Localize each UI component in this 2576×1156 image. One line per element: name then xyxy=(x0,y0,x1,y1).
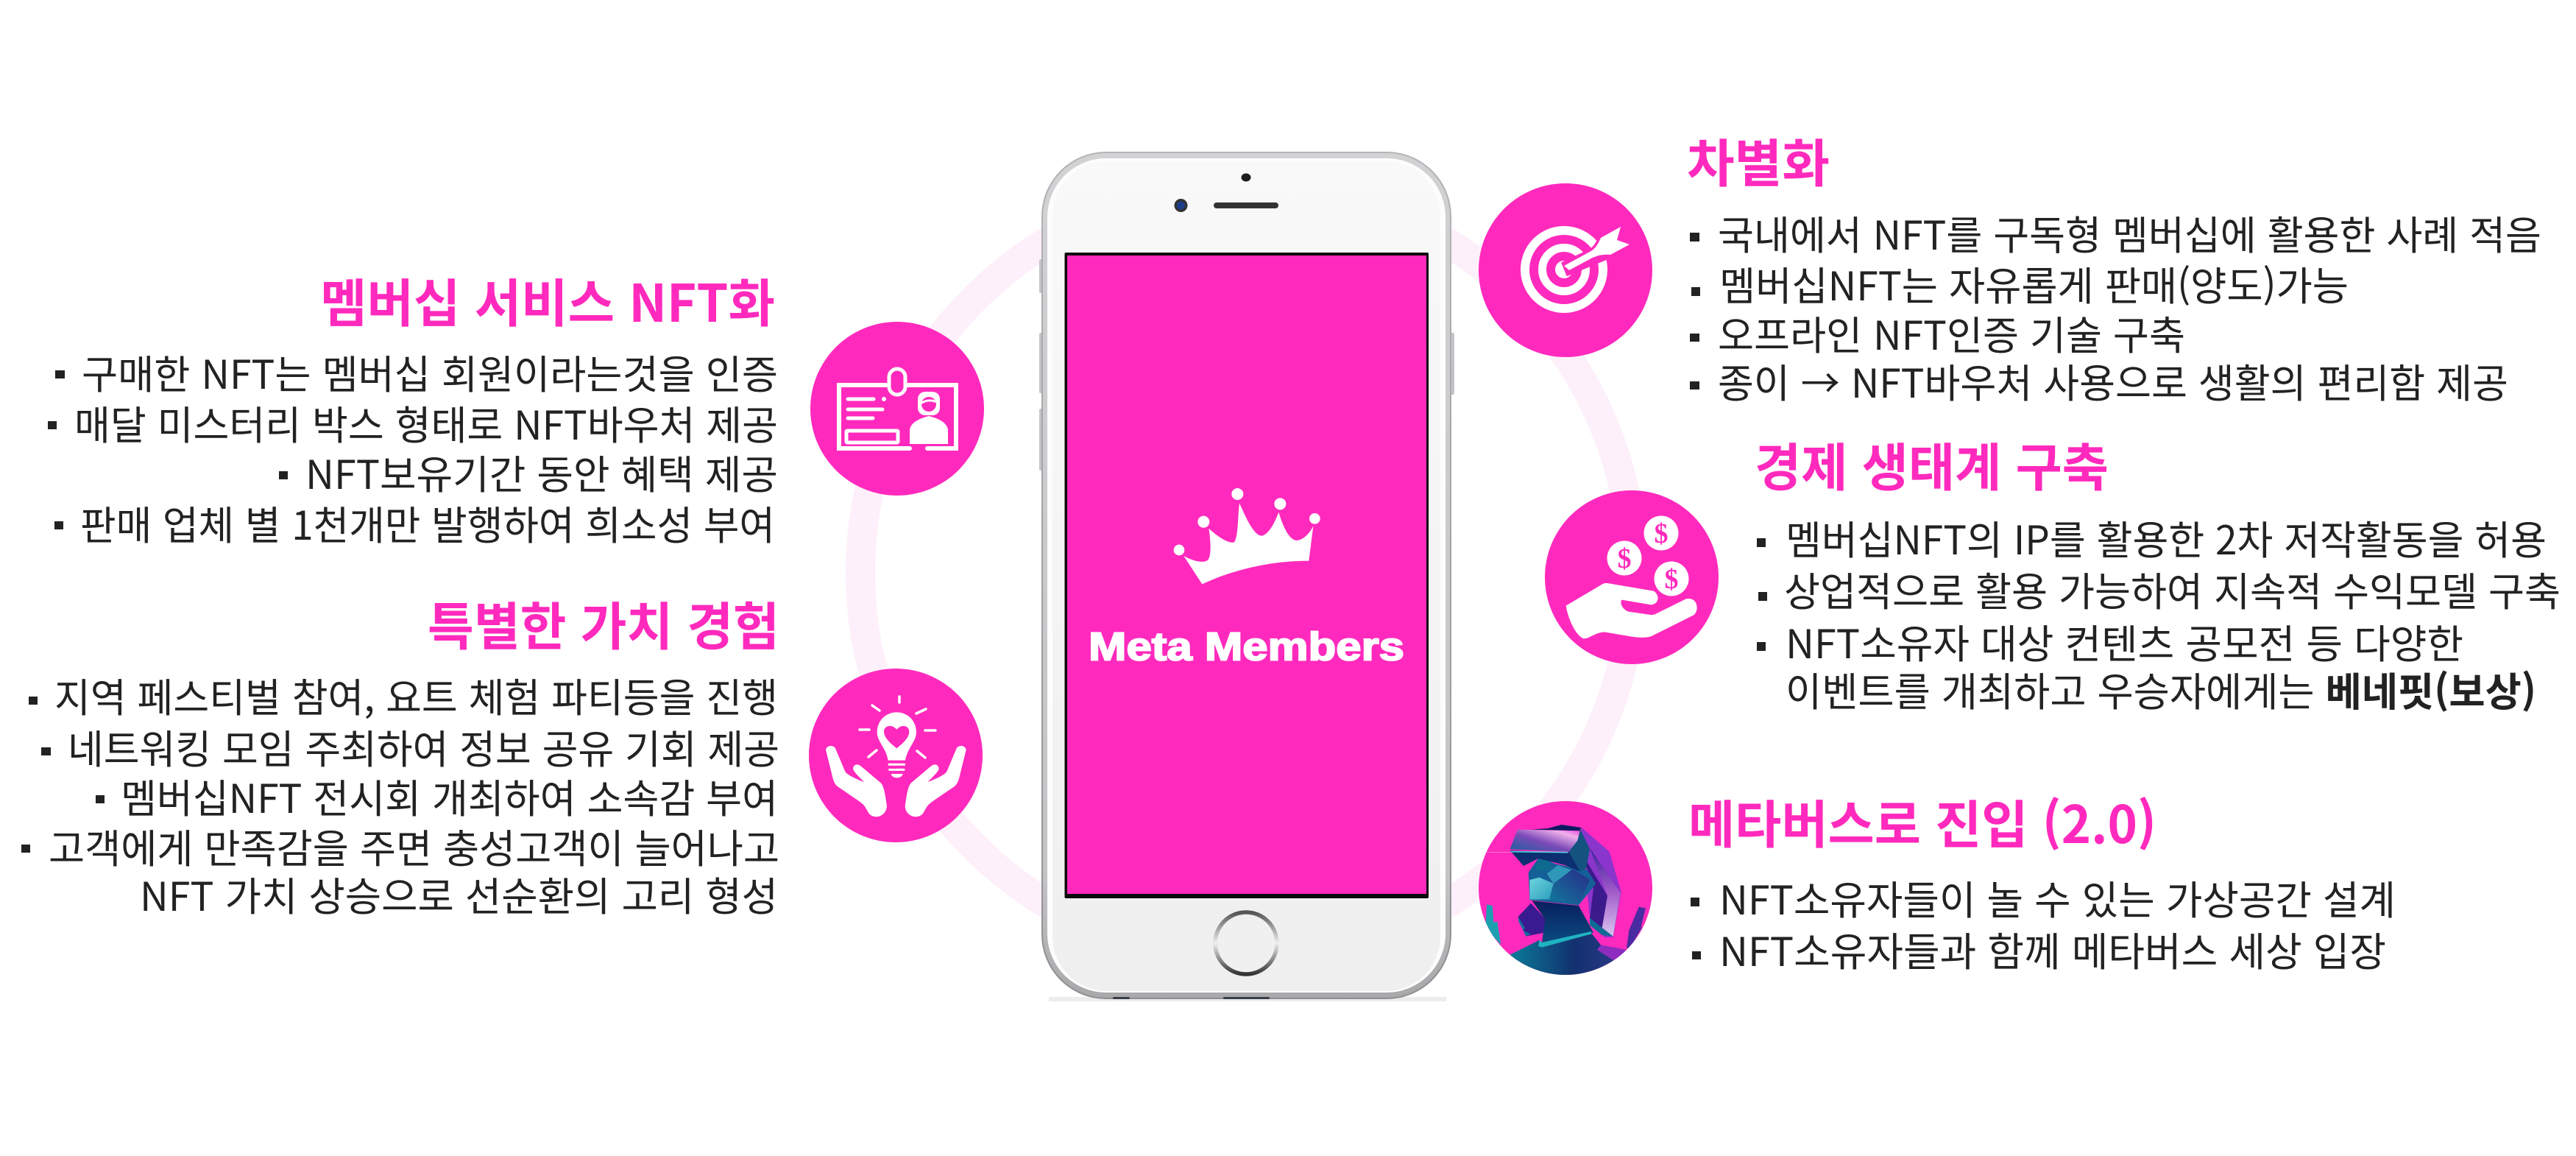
heading: 메타버스로 진입 (2.0) xyxy=(1688,784,2156,859)
icon: coins and hand: $ xyxy=(1665,564,1678,595)
background ring xyxy=(860,186,1633,959)
icon: coins and hand xyxy=(1545,490,1719,664)
panel: enter metaverse xyxy=(1479,784,2396,979)
bullet list: NFT 가치 상승으로 선순환의 고리 형성 xyxy=(140,864,778,923)
panel: special experience xyxy=(21,586,983,923)
bullet list: 오프라인 NFT인증 기술 구축 xyxy=(1718,303,2185,362)
bullet list: 고객에게 만족감을 주면 충성고객이 늘어나고 xyxy=(49,817,779,875)
heading: 특별한 가치 경험 xyxy=(428,586,779,660)
bullet list: 이벤트를 개최하고 우승자에게는 베네핏(보상) xyxy=(1786,660,2536,718)
phone face xyxy=(1052,161,1440,991)
bullet list: NFT소유자들과 함께 메타버스 세상 입장 xyxy=(1719,920,2386,978)
home button xyxy=(1215,912,1277,974)
phone side buttons xyxy=(1039,259,1454,470)
bullet list: NFT소유자 대상 컨텐츠 공모전 등 다양한 xyxy=(1786,612,2463,670)
front camera xyxy=(1175,199,1188,212)
heading: 차별화 xyxy=(1687,123,1830,197)
heading: 경제 생태계 구축 xyxy=(1755,427,2109,501)
panel: membership NFT xyxy=(48,263,984,551)
bullet list: 판매 업체 별 1천개만 발행하여 희소성 부여 xyxy=(80,493,775,551)
bullet list: 지역 페스티벌 참여, 요트 체험 파티등을 진행 xyxy=(54,666,778,724)
crown logo xyxy=(1174,488,1320,584)
icon: bulb and hands xyxy=(809,669,983,842)
bullet list xyxy=(48,342,778,551)
bottom notches xyxy=(1113,997,1130,999)
smartphone xyxy=(1039,152,1454,1001)
icon: target xyxy=(1479,183,1652,357)
panel: economic ecosystem xyxy=(1545,427,2561,718)
panel: differentiation xyxy=(1479,123,2541,409)
bullet list xyxy=(21,666,779,923)
speaker xyxy=(1214,202,1278,208)
icon: ID card xyxy=(810,322,984,496)
bullet list: 종이 → NFT바우처 사용으로 생활의 편리함 제공 xyxy=(1718,351,2508,409)
front sensor xyxy=(1241,174,1251,181)
phone shadow xyxy=(1049,997,1446,1001)
bullet list: NFT소유자들이 놀 수 있는 가상공간 설계 xyxy=(1719,868,2396,926)
bullet list xyxy=(1757,508,2561,718)
bullet list xyxy=(1690,203,2541,409)
phone body xyxy=(1041,152,1451,999)
bullet list: 네트워킹 모임 주최하여 정보 공유 기회 제공 xyxy=(68,717,779,775)
icon: coins and hand: $ xyxy=(1655,518,1668,549)
icon: VR headset portrait xyxy=(1479,801,1652,979)
phone screen xyxy=(1064,253,1429,898)
bullet list: 상업적으로 활용 가능하여 지속적 수익모델 구축 xyxy=(1784,560,2561,618)
bullet list: 구매한 NFT는 멤버십 회원이라는것을 인증 xyxy=(82,342,778,401)
screen title: Meta Members xyxy=(1089,624,1404,669)
heading: 멤버십 서비스 NFT화 xyxy=(320,263,775,337)
bullet list: 멤버십NFT는 자유롭게 판매(양도)가능 xyxy=(1719,254,2349,312)
bullet list xyxy=(1691,868,2396,978)
icon: coins and hand: $ xyxy=(1618,543,1631,574)
bullet list: 매달 미스터리 박스 형태로 NFT바우처 제공 xyxy=(74,393,778,451)
bullet list: 멤버십NFT의 IP를 활용한 2차 저작활동을 허용 xyxy=(1786,508,2547,566)
bullet list: 국내에서 NFT를 구독형 멤버십에 활용한 사례 적음 xyxy=(1718,203,2541,261)
bullet list: 멤버십NFT 전시회 개최하여 소속감 부여 xyxy=(121,766,778,825)
bullet list: NFT보유기간 동안 혜택 제공 xyxy=(305,443,778,501)
